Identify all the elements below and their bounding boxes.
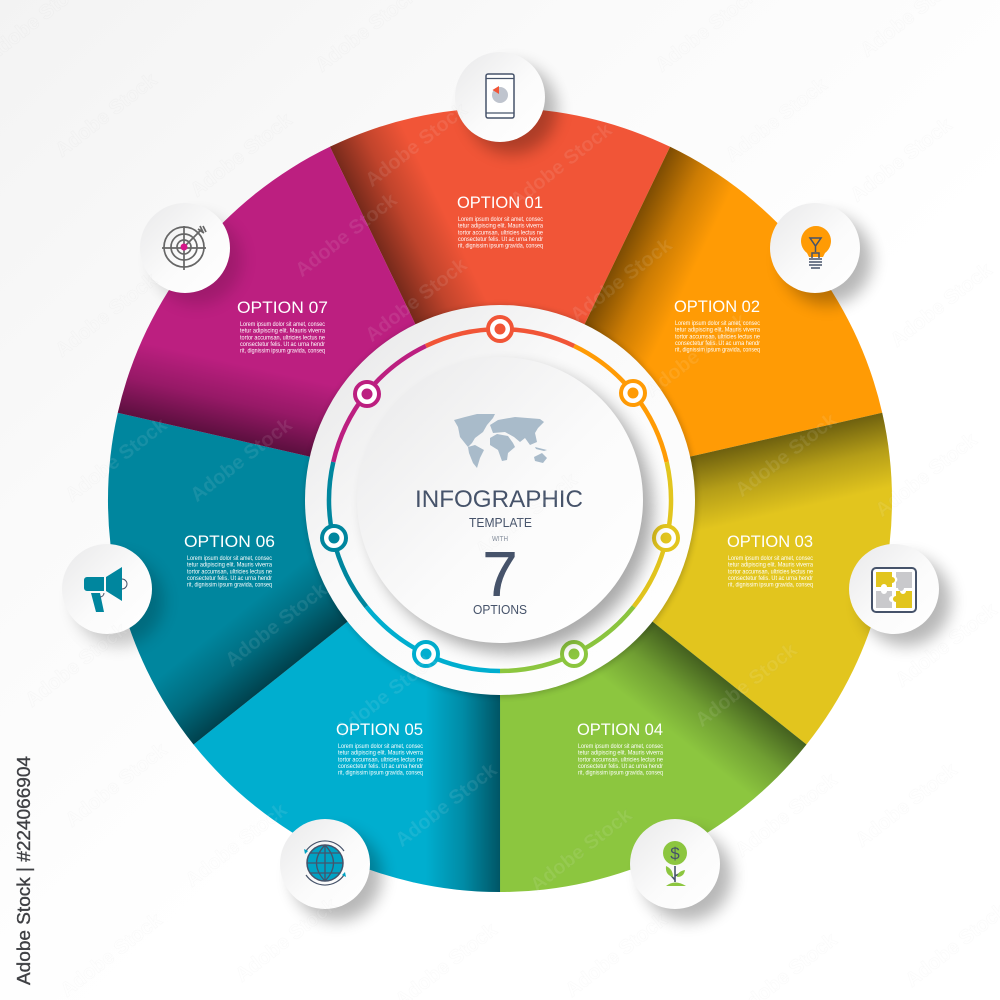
text: option 05: tetur adipiscing elit. Mauris viverra: [338, 751, 424, 757]
world map: [454, 414, 547, 468]
text: option 06: consectetur felis. Ut ac urna hendr: [187, 576, 272, 582]
segment 6 teal: [80, 334, 538, 753]
watermark repeats: Adobe Stock: [56, 908, 167, 1000]
text: option 01: rit, dignissim ipsum gravida, conseq: [458, 244, 543, 250]
node 3: [654, 526, 678, 550]
watermark repeats: Adobe Stock: [331, 648, 442, 742]
text: option 06: Lorem ipsum dolor sit amet, consec: [187, 556, 272, 562]
watermark repeats: Adobe Stock: [51, 268, 162, 362]
text: option 01: [457, 193, 544, 250]
text: option 03: [727, 532, 814, 589]
label: OPTIONS: OPTIONS: [473, 602, 527, 617]
watermark repeats: Adobe Stock: [561, 908, 672, 1000]
watermark repeats: Adobe Stock: [566, 233, 677, 327]
node 6: [322, 526, 346, 550]
watermark repeats: Adobe Stock: [61, 738, 172, 832]
text: option 06: tortor accumsan, ultricies lectus ne: [187, 569, 273, 575]
subtitle: TEMPLATE: TEMPLATE: [469, 515, 532, 530]
text: option 05: tortor accumsan, ultricies lectus ne: [338, 757, 424, 763]
node 1: [488, 317, 512, 341]
watermark repeats: Adobe Stock: [731, 408, 842, 502]
text: option 02: rit, dignissim ipsum gravida, conseq: [675, 348, 760, 354]
watermark repeats: Adobe Stock: [526, 803, 637, 897]
text: option 06: [184, 532, 275, 589]
text: option 02: tortor accumsan, ultricies lectus ne: [675, 334, 761, 340]
segment 4 green: [347, 426, 823, 927]
watermark repeats: Adobe Stock: [231, 893, 342, 987]
icon circle: megaphone: [62, 544, 164, 646]
node 4: [562, 642, 586, 666]
text: option 04: [577, 720, 664, 777]
number 7: 7: [482, 540, 518, 610]
stock id vertical label: Adobe Stock | #224066904: [13, 756, 34, 985]
white center ring: [305, 305, 697, 697]
watermark repeats: Adobe Stock: [21, 618, 132, 712]
text: option 03: tortor accumsan, ultricies lectus ne: [728, 569, 814, 575]
text: option 05: rit, dignissim ipsum gravida, conseq: [338, 771, 423, 777]
segment 3 yellow: [462, 334, 920, 753]
icon circle: money plant: [630, 819, 732, 921]
text: option 02: tetur adipiscing elit. Mauris viverra: [675, 328, 761, 334]
watermark repeats: Adobe Stock: [471, 468, 582, 562]
text: option 04: rit, dignissim ipsum gravida, conseq: [578, 771, 663, 777]
node 5: [414, 642, 438, 666]
text: option 07: Lorem ipsum dolor sit amet, consec: [240, 322, 325, 328]
text: option 05: Lorem ipsum dolor sit amet, consec: [338, 744, 423, 750]
segment 7 magenta: [87, 123, 606, 633]
text: option 03: tetur adipiscing elit. Mauris viverra: [728, 563, 814, 569]
segment 2 orange: [394, 123, 913, 633]
watermark repeats: Adobe Stock: [391, 758, 502, 852]
text: option 04: OPTION 04: [577, 720, 663, 739]
icon circle: money plant: $: [670, 844, 680, 863]
text: option 05: consectetur felis. Ut ac urna hendr: [338, 764, 423, 770]
watermark repeats: Adobe Stock: [851, 758, 962, 852]
text: option 07: rit, dignissim ipsum gravida, conseq: [240, 349, 325, 355]
text: option 01: tetur adipiscing elit. Mauris viverra: [458, 224, 544, 230]
watermark repeats: Adobe Stock: [846, 113, 957, 207]
text: option 05: [336, 720, 424, 777]
segment 1 red: [330, 108, 670, 500]
text: option 07: tetur adipiscing elit. Mauris viverra: [240, 329, 326, 335]
text: option 02: OPTION 02: [674, 297, 760, 316]
watermark repeats: Adobe Stock: [731, 768, 842, 862]
text: option 04: tortor accumsan, ultricies lectus ne: [578, 757, 664, 763]
text: option 02: Lorem ipsum dolor sit amet, consec: [675, 321, 760, 327]
icon circle: phone: [455, 52, 557, 154]
text: option 07: consectetur felis. Ut ac urna hendr: [240, 342, 325, 348]
watermark repeats: Adobe Stock: [361, 98, 472, 192]
icon circle: light bulb: [770, 203, 872, 305]
watermark repeats: Adobe Stock: [291, 188, 402, 282]
watermark repeats: Adobe Stock: [61, 413, 172, 507]
text: option 01: Lorem ipsum dolor sit amet, consec: [458, 217, 543, 223]
label: WITH: WITH: [492, 536, 508, 543]
text: option 06: rit, dignissim ipsum gravida, conseq: [187, 583, 272, 589]
text: option 04: tetur adipiscing elit. Mauris viverra: [578, 751, 664, 757]
watermark repeats: Adobe Stock: [186, 413, 297, 507]
text: option 01: consectetur felis. Ut ac urna hendr: [458, 237, 543, 243]
watermark repeats: Adobe Stock: [891, 598, 1000, 692]
ring line with coloured arcs: [329, 329, 671, 671]
watermark repeats: Adobe Stock: [186, 108, 297, 202]
watermark repeats: Adobe Stock: [221, 578, 332, 672]
text: option 06: OPTION 06: [184, 532, 275, 551]
text: option 07: [237, 298, 328, 355]
watermark repeats: Adobe Stock: [691, 638, 802, 732]
icon circle: target: [140, 203, 242, 305]
text: option 04: consectetur felis. Ut ac urna hendr: [578, 764, 663, 770]
title: INFOGRAPHIC: INFOGRAPHIC: [415, 486, 583, 513]
text: option 05: OPTION 05: [336, 720, 423, 739]
watermark repeats: Adobe Stock: [181, 798, 292, 892]
segment 5 blue: [177, 426, 653, 927]
text: option 07: OPTION 07: [237, 298, 328, 317]
watermark repeats: Adobe Stock: [871, 428, 982, 522]
watermark repeats: Adobe Stock: [506, 118, 617, 212]
text: option 01: tortor accumsan, ultricies lectus ne: [458, 230, 544, 236]
node 2: [621, 381, 645, 405]
text: option 01: OPTION 01: [457, 193, 543, 212]
text: option 02: [674, 297, 761, 354]
watermark repeats: Adobe Stock: [886, 258, 997, 352]
text: option 03: Lorem ipsum dolor sit amet, consec: [728, 556, 813, 562]
text: option 03: consectetur felis. Ut ac urna hendr: [728, 576, 813, 582]
icon circle: globe: [280, 819, 382, 921]
watermark repeats: Adobe Stock: [51, 68, 162, 162]
text: option 06: tetur adipiscing elit. Mauris viverra: [187, 563, 273, 569]
text: option 07: tortor accumsan, ultricies lectus ne: [240, 335, 326, 341]
text: option 03: rit, dignissim ipsum gravida, conseq: [728, 583, 813, 589]
text: option 02: consectetur felis. Ut ac urna hendr: [675, 341, 760, 347]
watermark repeats: Adobe Stock: [641, 308, 752, 402]
watermark repeats: Adobe Stock: [721, 73, 832, 167]
text: option 03: OPTION 03: [727, 532, 813, 551]
inner disc with shadow: [357, 357, 653, 653]
text: option 04: Lorem ipsum dolor sit amet, consec: [578, 744, 663, 750]
watermark repeats: Adobe Stock: [361, 253, 472, 347]
node 7: [355, 382, 379, 406]
icon circle: puzzle: [849, 544, 951, 646]
